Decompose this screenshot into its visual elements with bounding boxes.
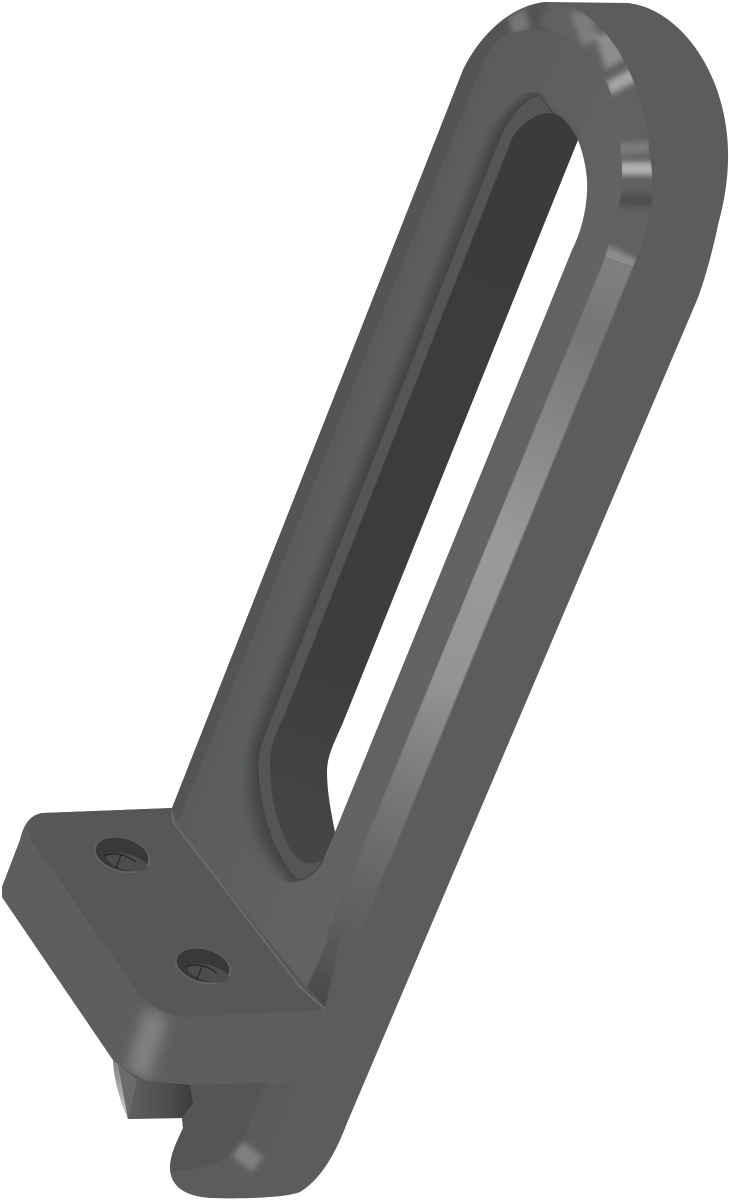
chamfer: right band of arm xyxy=(327,257,633,940)
front band of base block xyxy=(113,977,345,1085)
notch: underside dark block xyxy=(128,1080,193,1119)
slot dark inner wall xyxy=(270,113,578,863)
notch right wall xyxy=(243,1082,297,1156)
top surface of base block xyxy=(29,808,325,1017)
side surface of base block xyxy=(2,825,150,1070)
notch: thin bright edge xyxy=(113,1060,128,1119)
chamfer highlights on curved top xyxy=(508,8,656,278)
hook inner face xyxy=(172,1083,267,1172)
corner highlight of base block xyxy=(126,1008,168,1082)
slot wall xyxy=(235,92,578,882)
screw hole 2 xyxy=(171,942,235,990)
hook chamfer xyxy=(173,1140,264,1198)
chamfer: band around top and left edge of arm xyxy=(172,2,653,900)
dark triangle at arm foot xyxy=(307,920,343,1008)
crease line between base and arm xyxy=(172,812,325,1009)
slot opening xyxy=(327,140,587,832)
slot ridge xyxy=(258,95,553,880)
front face of arm xyxy=(172,30,622,1010)
screw hole 1 xyxy=(90,831,154,879)
